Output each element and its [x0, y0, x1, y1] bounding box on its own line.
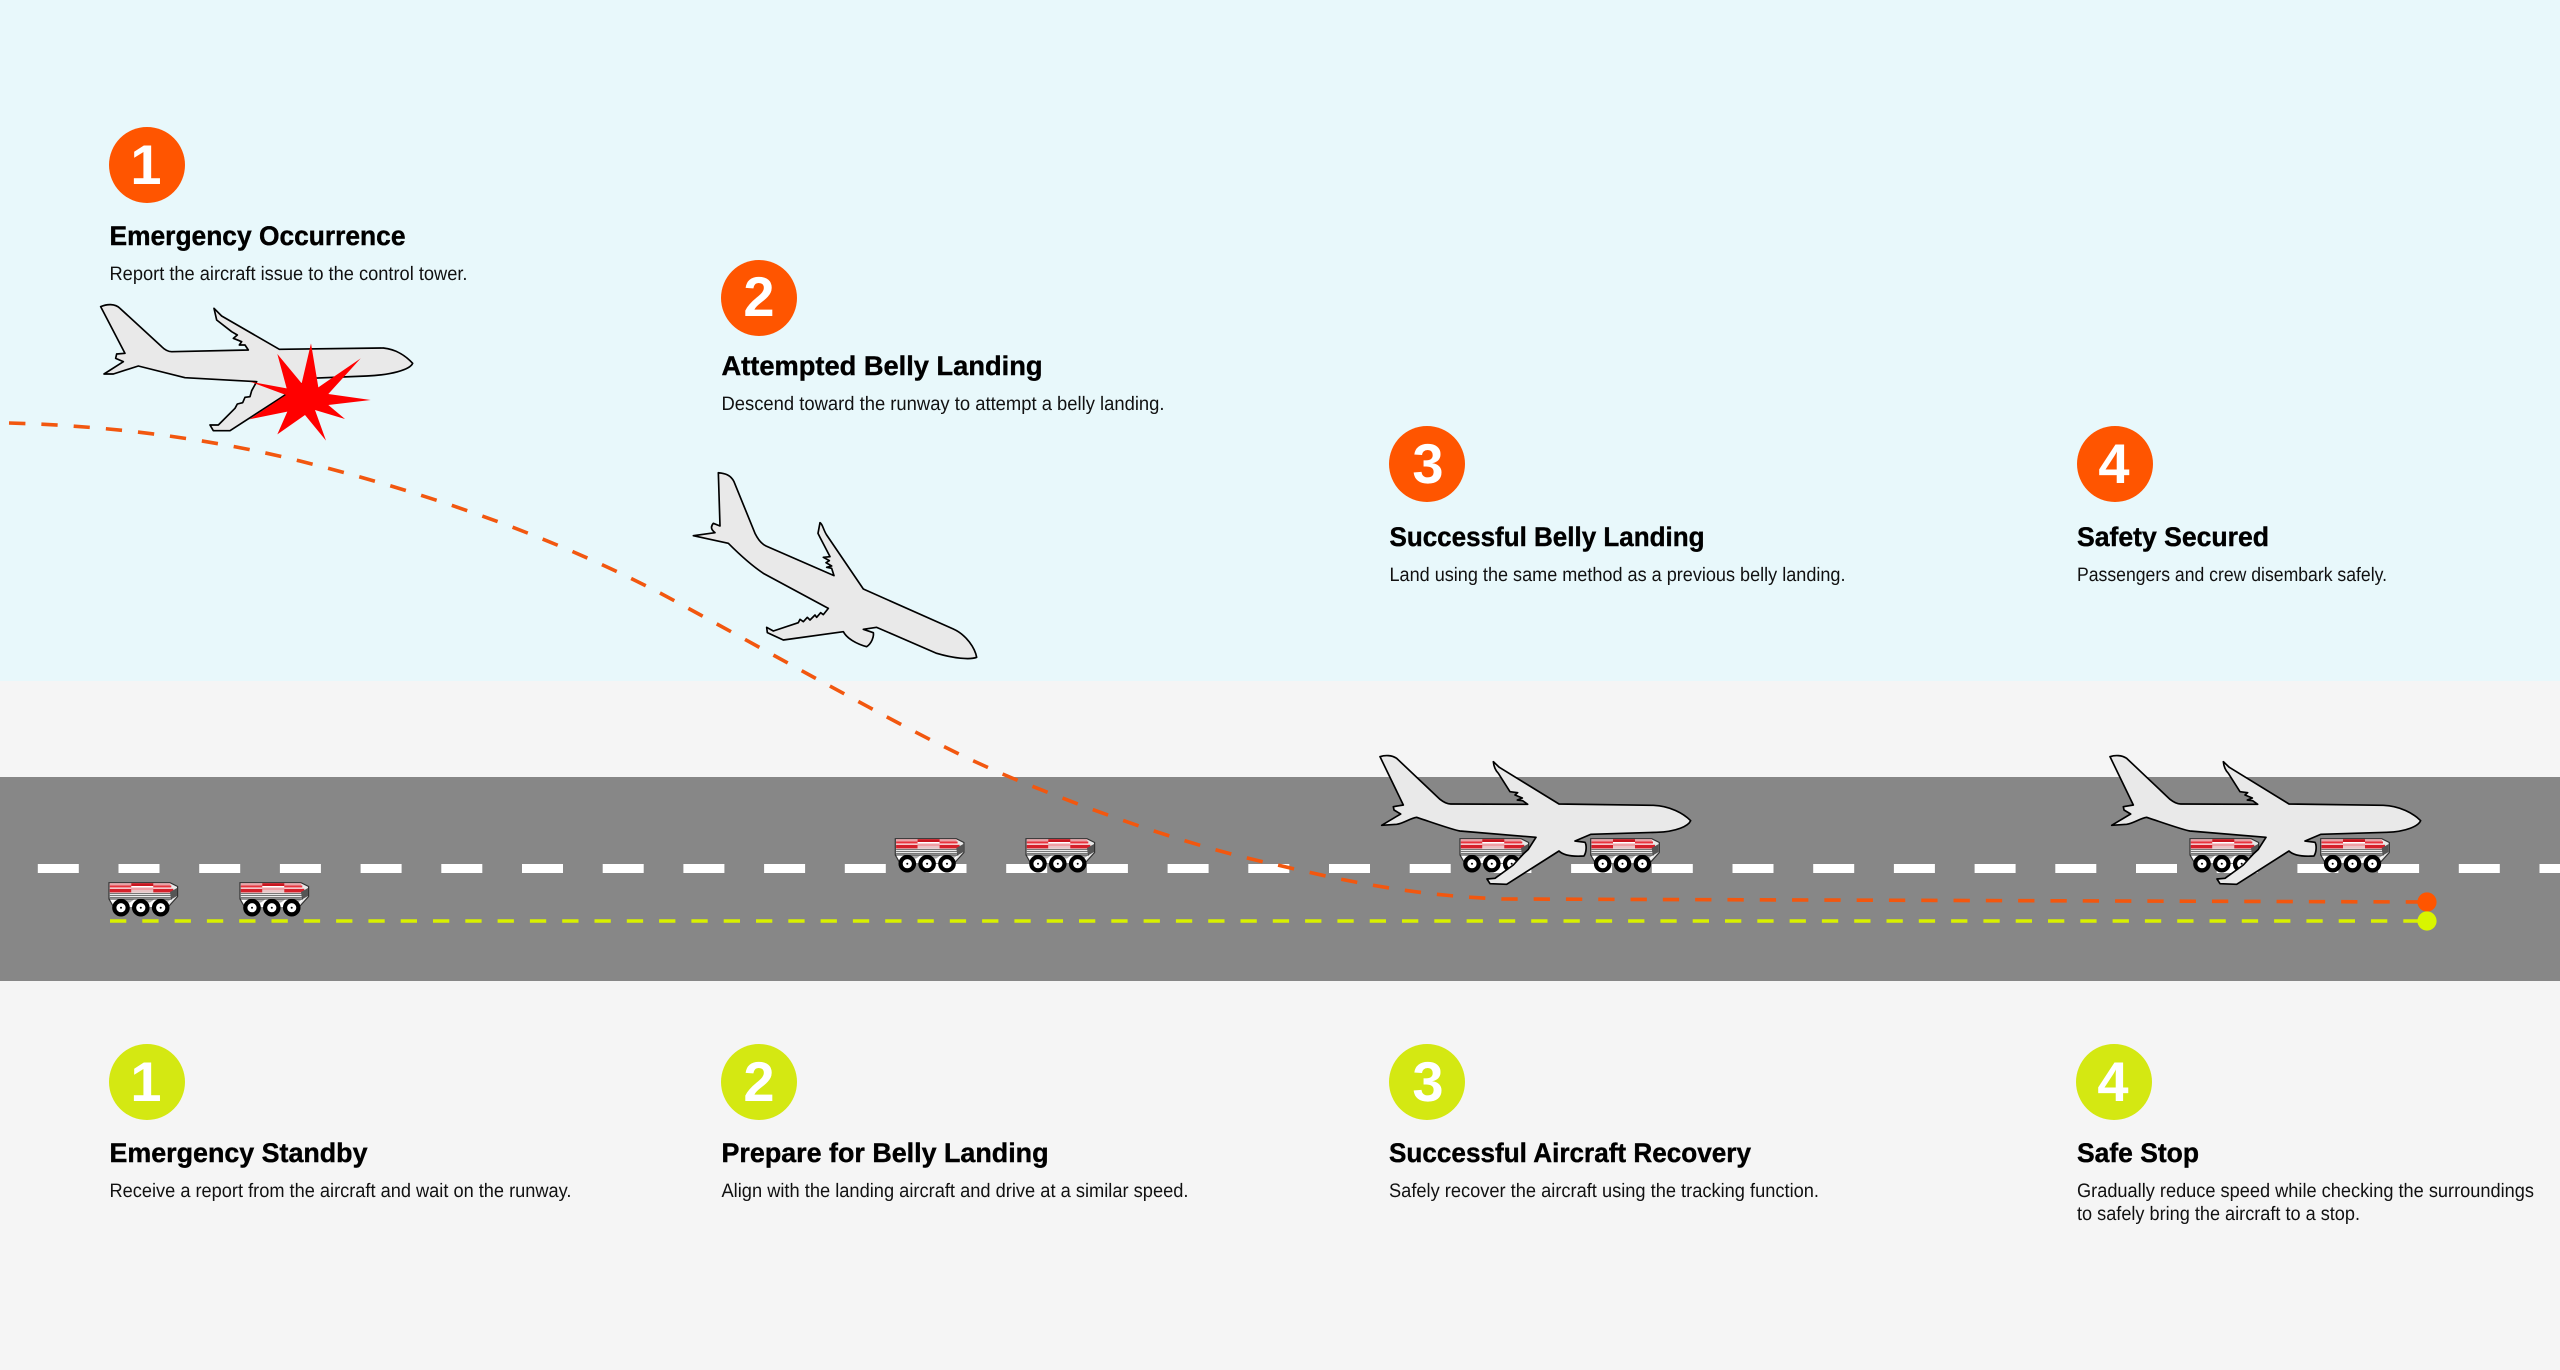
badge 3 lime — [1389, 1044, 1465, 1120]
rovers: stage 2 — [895, 839, 1095, 872]
description: Gradually reduce speed while checking the surroundings — [2077, 1180, 2534, 1202]
background: ground — [0, 681, 2560, 1370]
heading: Safe Stop — [2077, 1138, 2199, 1168]
runway — [0, 777, 2560, 981]
step: safety secured — [2077, 426, 2387, 586]
badge 4 orange: 4 — [2098, 432, 2130, 495]
badge 2 lime: 2 — [743, 1050, 775, 1113]
heading: Emergency Standby — [110, 1138, 368, 1168]
rovers: stage 1 — [109, 883, 309, 916]
badge 3 orange — [1389, 426, 1465, 502]
description: Receive a report from the aircraft and wait on the runway. — [110, 1180, 572, 1202]
step: successful belly landing — [1389, 426, 1846, 586]
step: prepare for belly landing — [721, 1044, 1188, 1202]
heading: Attempted Belly Landing — [722, 351, 1042, 381]
rover tracking line — [110, 919, 2427, 923]
icon: red explosion — [249, 343, 371, 441]
description — [2077, 1180, 2534, 1225]
step: attempted belly landing — [721, 260, 1164, 415]
airplane: emergency with engine explosion — [101, 305, 413, 441]
endpoint: aircraft — [2417, 892, 2437, 912]
airplane: landed on rovers, stage 4 — [2110, 756, 2421, 884]
badge 4 lime — [2076, 1044, 2152, 1120]
description: Land using the same method as a previous belly landing. — [1390, 564, 1846, 586]
description: Passengers and crew disembark safely. — [2077, 564, 2387, 586]
badge 4 lime: 4 — [2097, 1050, 2129, 1113]
badge 3 lime: 3 — [1412, 1050, 1444, 1113]
heading: Successful Aircraft Recovery — [1389, 1138, 1751, 1168]
description: Align with the landing aircraft and drive at a similar speed. — [722, 1180, 1188, 1202]
step: emergency occurrence — [109, 127, 468, 285]
description: to safely bring the aircraft to a stop. — [2077, 1203, 2360, 1225]
heading: Emergency Occurrence — [110, 221, 406, 251]
badge 1 orange: 1 — [130, 133, 162, 196]
step: successful aircraft recovery — [1389, 1044, 1819, 1202]
aircraft trajectory line — [9, 423, 2427, 902]
badge 1 orange — [109, 127, 185, 203]
airplane: landed on rovers, stage 3 — [1380, 756, 1691, 884]
endpoint: rover — [2417, 911, 2437, 931]
airplane: descending — [693, 473, 977, 659]
background: sky — [0, 0, 2560, 681]
step: safe stop — [2076, 1044, 2534, 1225]
description: Report the aircraft issue to the control tower. — [110, 263, 468, 285]
heading: Prepare for Belly Landing — [722, 1138, 1048, 1168]
badge 2 orange — [721, 260, 797, 336]
rovers: stage 4 — [2190, 839, 2389, 872]
badge 2 lime — [721, 1044, 797, 1120]
badge 4 orange — [2077, 426, 2153, 502]
heading: Successful Belly Landing — [1390, 522, 1704, 552]
description: Safely recover the aircraft using the tracking function. — [1389, 1180, 1819, 1202]
badge 2 orange: 2 — [743, 265, 775, 328]
description: Descend toward the runway to attempt a belly landing. — [722, 393, 1164, 415]
rovers: stage 3 — [1460, 839, 1659, 872]
badge 3 orange: 3 — [1412, 432, 1444, 495]
badge 1 lime: 1 — [130, 1050, 162, 1113]
badge 1 lime — [109, 1044, 185, 1120]
step: emergency standby — [109, 1044, 572, 1202]
heading: Safety Secured — [2077, 522, 2269, 552]
